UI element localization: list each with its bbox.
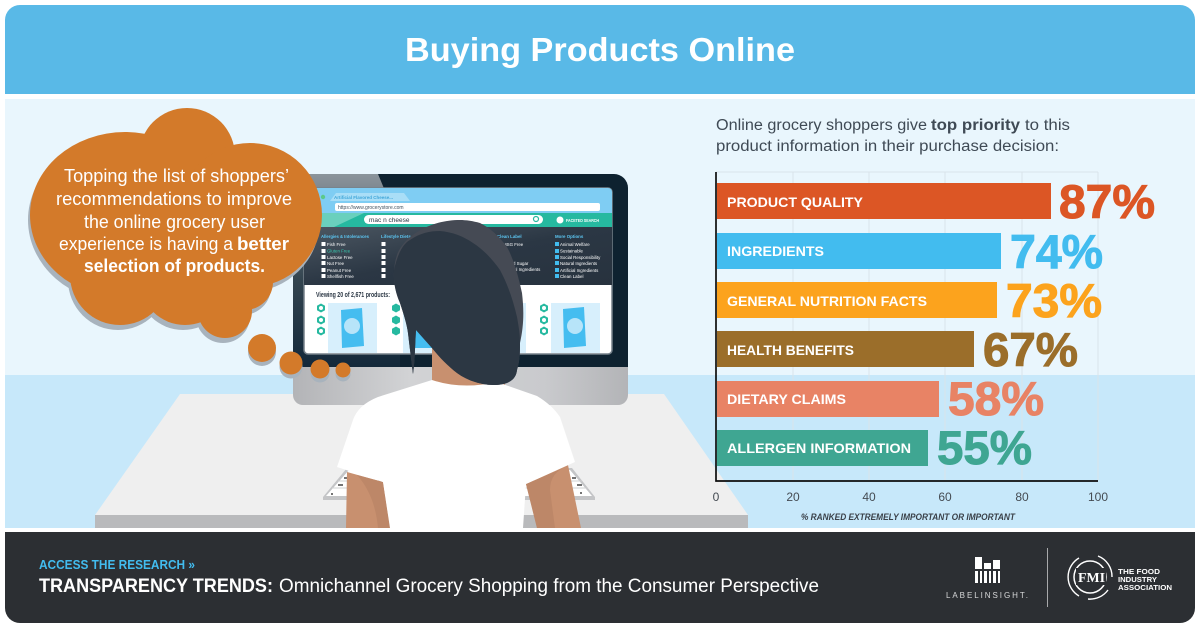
filter: allergies: Fish Free bbox=[327, 242, 346, 247]
product card 1 bbox=[317, 303, 377, 353]
bar: ingredients: 74% bbox=[1010, 225, 1103, 278]
bar chart bbox=[713, 172, 1155, 523]
product card 2 bbox=[392, 303, 452, 353]
product card 4 bbox=[540, 303, 600, 353]
filter: more options: More Options bbox=[555, 234, 584, 239]
bar: ingredients bbox=[717, 225, 1103, 278]
product card 3 bbox=[500, 303, 526, 353]
access the research link: ACCESS THE RESEARCH » bbox=[39, 558, 195, 572]
chart heading: top priority bbox=[931, 117, 1020, 134]
bar: dietary claims: 58% bbox=[948, 372, 1044, 425]
background panel bbox=[5, 99, 1195, 528]
logo: label insight: LABELINSIGHT. bbox=[946, 591, 1028, 600]
bar: health benefits bbox=[717, 323, 1078, 376]
bar: general nutrition facts bbox=[717, 274, 1102, 327]
filter: more options: Natural Ingredients bbox=[560, 261, 598, 266]
screen: https://www.grocerystore.com bbox=[338, 205, 404, 211]
axis caption: % RANKED EXTREMELY IMPORTANT OR IMPORTANT bbox=[801, 512, 1016, 523]
bubble text bbox=[56, 166, 292, 276]
filter: allergies: Allergies & Intolerances bbox=[321, 234, 370, 239]
filter: more options: Sustainable bbox=[560, 248, 584, 254]
bubble shape bbox=[30, 108, 350, 378]
logo: FMI bbox=[1068, 556, 1172, 599]
left arm bbox=[346, 472, 390, 528]
screen bbox=[304, 188, 612, 354]
keyboard bbox=[323, 468, 595, 500]
filter: more options bbox=[555, 234, 601, 279]
bar: general nutrition facts: 73% bbox=[1006, 274, 1102, 327]
report title bbox=[39, 576, 819, 597]
bubble text: Topping the list of shoppers’ bbox=[64, 166, 289, 186]
bubble text: recommendations to improve bbox=[56, 189, 292, 209]
bubble text: experience is having a bbox=[59, 234, 234, 254]
filter: more options: Artificial Ingredients bbox=[560, 268, 599, 273]
axis labels: 80 bbox=[1015, 490, 1029, 504]
logo: FMI: ASSOCIATION bbox=[1118, 583, 1172, 592]
screen: mac n cheese bbox=[369, 217, 410, 224]
header banner bbox=[5, 5, 1195, 94]
neck bbox=[432, 335, 505, 388]
axis labels: 20 bbox=[786, 490, 800, 504]
filter: clean label: d Sugar bbox=[513, 261, 529, 266]
computer monitor bbox=[293, 174, 628, 405]
bubble shadow bbox=[28, 113, 350, 382]
bar: dietary claims bbox=[717, 372, 1044, 425]
filter: allergies: Lactose Free bbox=[327, 255, 353, 260]
axis labels: 100 bbox=[1088, 490, 1108, 504]
results count: Viewing 20 of 2,671 products: bbox=[316, 292, 390, 299]
filter: lifestyle diets: Lifestyle Diets bbox=[381, 234, 411, 239]
filter: lifestyle diets bbox=[381, 234, 411, 278]
person at computer bbox=[337, 220, 581, 528]
filter: clean label: ial Ingredients bbox=[513, 267, 541, 272]
filter: allergies: Shellfish Free bbox=[327, 274, 354, 279]
filter: allergies: Gluten Free bbox=[327, 248, 351, 254]
axis labels bbox=[713, 490, 1108, 504]
bubble text: the online grocery user bbox=[84, 212, 265, 232]
bar: allergen information bbox=[717, 421, 1032, 474]
axis labels: 60 bbox=[938, 490, 952, 504]
chart heading: to this bbox=[1025, 117, 1070, 134]
filter: more options: Clean Label bbox=[560, 274, 583, 279]
filter: allergies bbox=[321, 234, 370, 279]
filter: clean label: MSG Free bbox=[503, 242, 524, 247]
logo: label insight bbox=[946, 557, 1028, 600]
chart heading: Online grocery shoppers give bbox=[716, 117, 927, 134]
logo: FMI: INDUSTRY bbox=[1118, 575, 1157, 584]
filter: more options: Animal Welfare bbox=[560, 242, 590, 247]
filter: allergies: Peanut Free bbox=[327, 268, 352, 273]
logo: FMI: THE FOOD bbox=[1118, 567, 1161, 576]
hair bbox=[394, 220, 523, 385]
bar: allergen information: 55% bbox=[937, 421, 1032, 474]
filter: more options: Social Responsibility bbox=[560, 255, 601, 260]
right arm bbox=[526, 465, 581, 528]
bar: dietary claims: DIETARY CLAIMS bbox=[727, 391, 846, 407]
chart heading bbox=[716, 117, 1070, 155]
thought bubble bbox=[28, 108, 350, 382]
bar: health benefits: 67% bbox=[983, 323, 1078, 376]
logo divider bbox=[1047, 548, 1048, 607]
bubble text: better bbox=[237, 234, 289, 254]
filter: clean label bbox=[497, 234, 541, 272]
bar: allergen information: ALLERGEN INFORMATION bbox=[727, 440, 911, 456]
report title: TRANSPARENCY TRENDS: bbox=[39, 576, 273, 597]
screen: Artificial Flavored Cheese... bbox=[334, 195, 393, 200]
axis labels: 0 bbox=[713, 490, 720, 504]
report title: Omnichannel Grocery Shopping from the Consumer Perspective bbox=[279, 576, 819, 597]
desk bbox=[95, 394, 748, 528]
axis labels: 40 bbox=[862, 490, 876, 504]
footer bbox=[5, 532, 1195, 623]
bar: product quality bbox=[717, 175, 1155, 228]
title: Buying Products Online bbox=[405, 31, 795, 68]
bar: product quality: 87% bbox=[1059, 175, 1155, 228]
screen: FACETED SEARCH bbox=[566, 218, 599, 224]
chart heading: product information in their purchase decision: bbox=[716, 138, 1059, 155]
filter: clean label: Clean Label bbox=[497, 234, 522, 239]
bar: ingredients: INGREDIENTS bbox=[727, 243, 824, 259]
bar: general nutrition facts: GENERAL NUTRITION FACTS bbox=[727, 293, 927, 309]
bar: health benefits: HEALTH BENEFITS bbox=[727, 342, 854, 358]
logo: FMI: FMI bbox=[1078, 571, 1105, 586]
filter: allergies: Nut Free bbox=[327, 261, 345, 266]
bar: product quality: PRODUCT QUALITY bbox=[727, 194, 864, 210]
bubble text: selection of products. bbox=[84, 256, 265, 276]
white shirt bbox=[337, 380, 575, 528]
